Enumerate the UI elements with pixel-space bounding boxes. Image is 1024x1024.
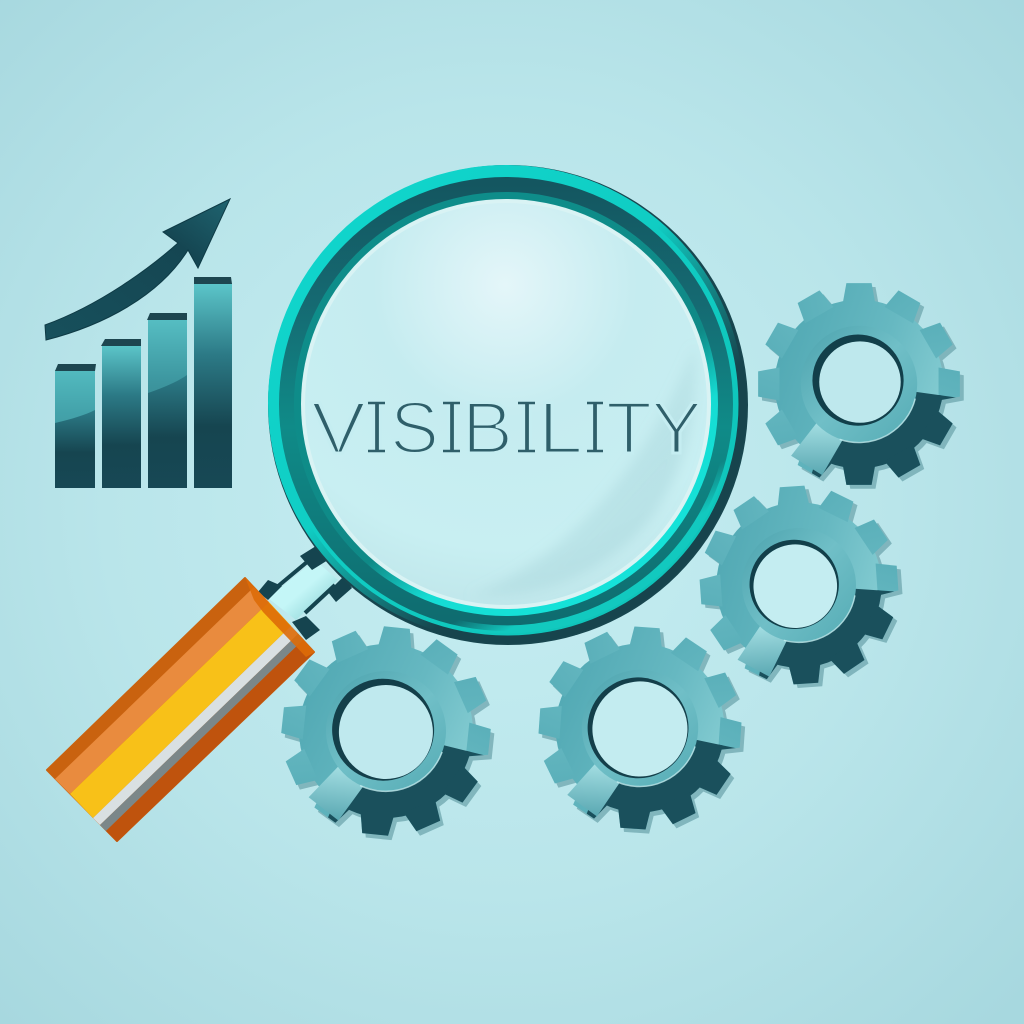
word: VISIBILITY: V [311,388,366,469]
gear top right [758,283,964,489]
word: VISIBILITY: I [367,388,387,469]
rising arrow [45,199,230,340]
magnifying glass [47,165,748,842]
lens rim [268,165,748,645]
orange handle [47,577,315,842]
word: VISIBILITY: T [606,388,652,469]
gear bottom left [271,617,504,850]
gear middle right [694,479,909,694]
word: VISIBILITY: Y [651,388,702,469]
word: VISIBILITY: I [585,388,605,469]
bar 3 [147,313,187,488]
word: VISIBILITY: B [462,388,513,469]
bar 4 [194,277,232,488]
glass lens [301,199,711,609]
bar 1 [55,364,96,488]
word: VISIBILITY: I [517,388,537,469]
gear bottom centre [532,620,752,840]
word: VISIBILITY: L [538,388,583,469]
metal neck [258,546,352,640]
bar chart with rising arrow [45,199,232,488]
word: VISIBILITY: I [442,388,462,469]
bar 2 [101,339,141,488]
word: VISIBILITY [311,388,702,469]
word: VISIBILITY: S [390,388,439,469]
